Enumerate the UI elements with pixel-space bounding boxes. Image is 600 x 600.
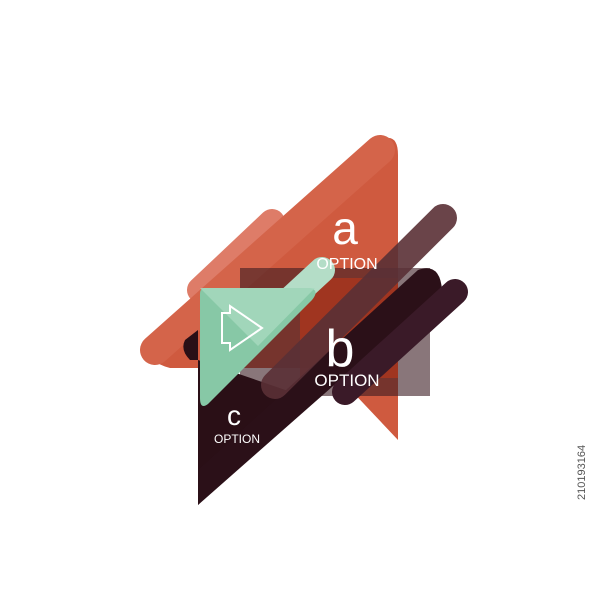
label: option c	[214, 400, 260, 446]
label: option a: a	[332, 202, 358, 254]
shape: orange back bar	[200, 222, 272, 290]
label: option b	[314, 320, 380, 390]
shape: dark maroon square	[240, 268, 430, 396]
label: option b: b	[326, 320, 354, 378]
shape: big orange triangle	[148, 138, 398, 440]
shape: dark left triangle (option c)	[183, 268, 442, 505]
label: option c: OPTION	[214, 432, 260, 446]
shape: green triangle	[200, 288, 316, 406]
label: option a	[316, 202, 378, 273]
side watermark id: 210193164	[576, 445, 588, 500]
shape: dark right bar	[345, 292, 455, 392]
label: option c: c	[227, 400, 241, 431]
icon: outlined arrow	[222, 306, 262, 350]
shape: maroon translucent bar	[275, 218, 443, 385]
label: option b: OPTION	[314, 371, 380, 390]
shape: light green bar	[270, 270, 322, 318]
label: option a: OPTION	[316, 256, 378, 273]
